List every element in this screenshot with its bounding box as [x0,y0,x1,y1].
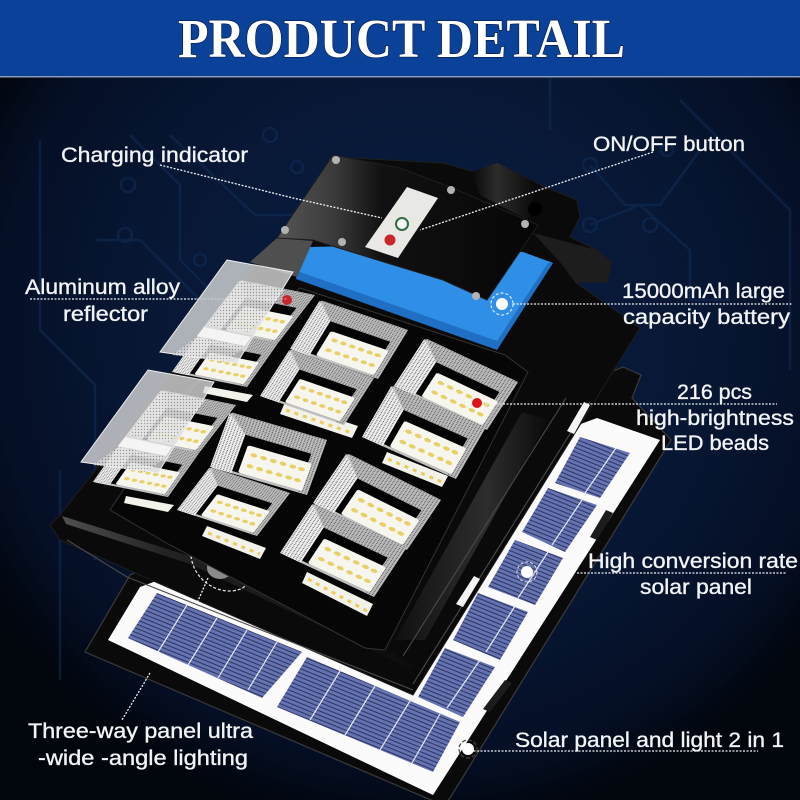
label: wide angle lighting: -wide -angle lighting [38,747,248,770]
label: battery capacity [622,280,791,329]
leader lines [30,152,792,751]
mount hole [528,202,542,216]
label: aluminum alloy reflector: reflector [63,303,148,326]
label: two in one: Solar panel and light 2 in 1 [515,729,784,752]
light sensor [191,556,247,591]
on/off button [384,234,396,246]
label: LED beads [636,381,794,455]
header band [0,0,800,78]
solar cells [128,437,630,772]
label: battery capacity: capacity battery [623,306,791,329]
reflector cells [177,300,518,597]
circuit board background pattern [40,75,790,680]
label: aluminum alloy reflector: Aluminum alloy [25,276,181,299]
red marker on reflector [282,295,292,305]
label: aluminum alloy reflector [25,276,181,326]
shoulder [533,233,612,282]
panel white backing [108,418,660,795]
label: on/off button: ON/OFF button [593,133,745,156]
top cover plate [277,155,538,300]
LED marker [472,398,482,408]
battery [296,245,553,350]
screws [281,156,529,300]
body white tabs [456,402,590,607]
LED strips [202,402,448,616]
battery marker [491,293,513,315]
module tray [110,288,528,650]
label: LED beads: 216 pcs [677,381,752,404]
lower lip highlight [62,516,413,670]
solar panel marker [517,562,537,582]
label: battery capacity: 15000mAh large [622,280,785,303]
bottom panel marker [459,740,477,758]
label: LED beads: LED beads [661,432,769,455]
label: wide angle lighting: Three-way panel ultra [28,720,253,743]
label: solar panel [588,550,798,599]
title: PRODUCT DETAIL [178,8,625,69]
body shell [50,157,640,695]
label: wide angle lighting [28,720,253,770]
frame dark tabs [483,510,613,712]
lamp body [50,157,640,695]
aluminum reflector module lower [81,370,236,512]
label: solar panel: solar panel [640,576,752,599]
aluminum reflector module upper [160,260,315,402]
label: LED beads: high-brightness [636,407,794,430]
label: charging indicator: Charging indicator [61,144,248,167]
side gray band [395,412,548,640]
gray top ledge [250,238,313,277]
label: solar panel: High conversion rate [588,550,798,573]
panel black frame [85,367,671,800]
solar panel frame [85,367,671,800]
charging indicator [396,218,408,230]
control label [365,187,438,258]
mounting neck [472,163,535,220]
